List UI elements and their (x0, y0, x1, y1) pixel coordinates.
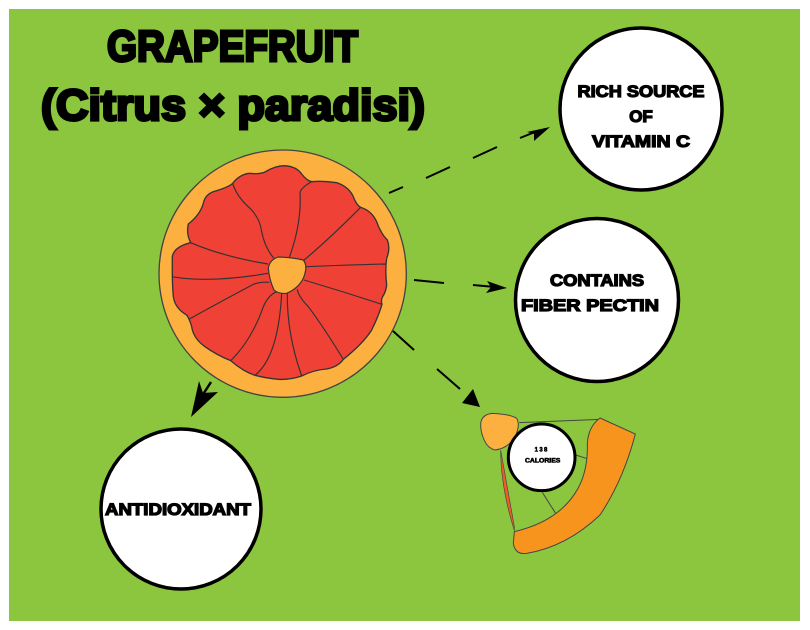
calories circle (508, 424, 575, 491)
circle: antioxidant (101, 429, 261, 589)
arrow: to fiber pectin (414, 280, 507, 293)
segment membranes (172, 182, 386, 376)
arrow: to calories slice (393, 331, 480, 407)
title (41, 22, 425, 130)
circle: rich source of vitamin C: VITAMIN C (592, 132, 690, 151)
rind piece (513, 418, 635, 554)
circle: contains fiber pectin: FIBER PECTIN (521, 296, 659, 315)
calories circle: 138 (535, 448, 549, 454)
circle: rich source of vitamin C (560, 28, 722, 190)
title: (Citrus × paradisi) (41, 81, 425, 130)
grapefruit slice illustration (159, 150, 406, 397)
core piece (481, 413, 518, 450)
wedge edges (519, 419, 600, 515)
arrow: to vitamin C (389, 127, 550, 193)
calories circle: CALORIES (525, 459, 560, 465)
circle: contains fiber pectin: CONTAINS (550, 271, 644, 290)
slice wedge with calories (481, 413, 635, 554)
flesh (172, 166, 389, 379)
core (268, 257, 306, 293)
arrow: to antioxidant (191, 381, 218, 417)
title: GRAPEFRUIT (107, 22, 358, 71)
circle: antioxidant: ANTIDIOXIDANT (105, 500, 252, 519)
circle: contains fiber pectin (516, 218, 678, 382)
rind (159, 150, 406, 397)
circle: rich source of vitamin C: OF (629, 107, 653, 126)
circle: rich source of vitamin C: RICH SOURCE (578, 82, 704, 101)
red sliver (501, 450, 514, 531)
